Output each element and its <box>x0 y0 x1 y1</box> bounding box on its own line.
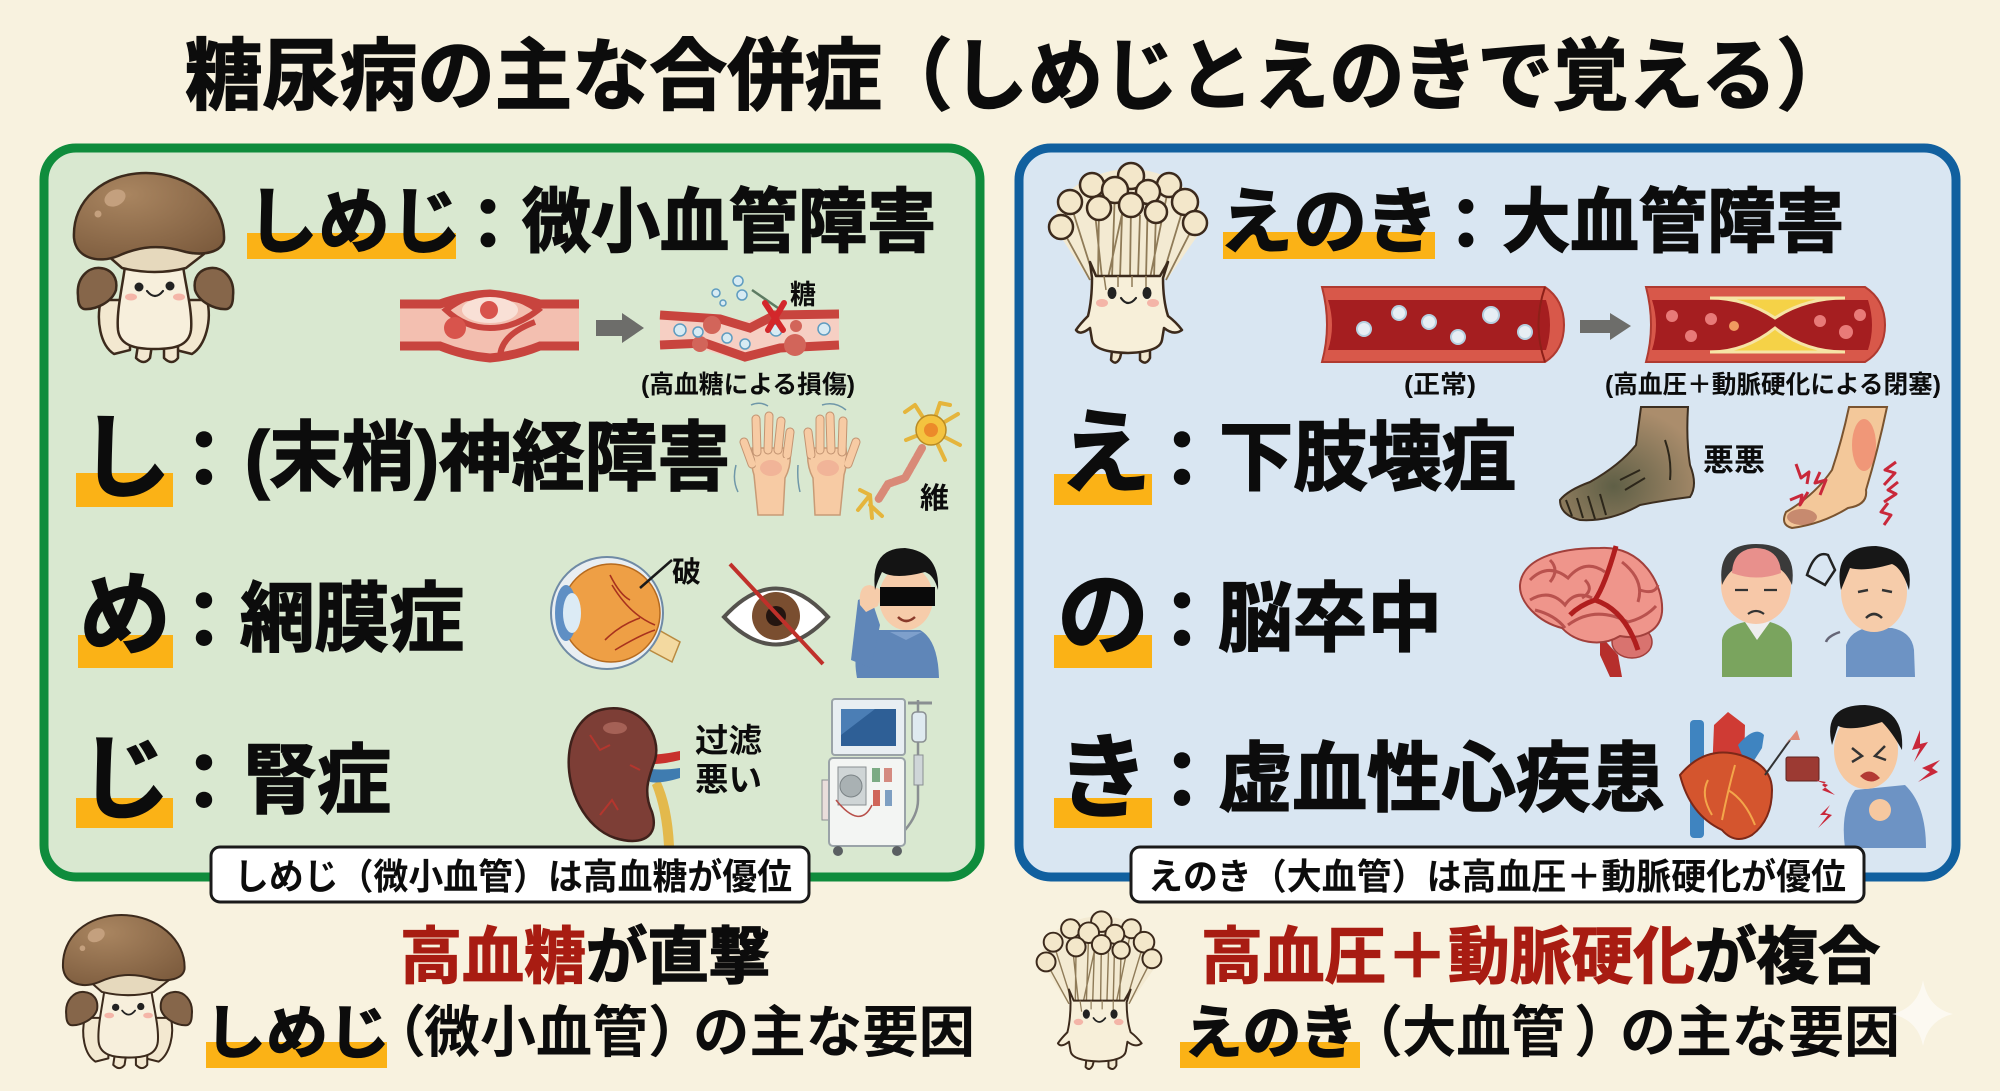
row: e gangrene: え <box>1059 403 1151 505</box>
caption: occlusion: (高血圧＋動脈硬化による閉塞) <box>1605 371 1941 399</box>
row: shi neuropathy: (末梢)神経障害 <box>245 416 730 501</box>
mascot: enoki <box>1049 163 1207 363</box>
row: no stroke <box>1054 565 1442 668</box>
heading: shimeji: しめじ <box>246 183 462 263</box>
arrow <box>596 313 644 343</box>
row: no stroke: の <box>1057 565 1149 667</box>
label: worsening: 悪悪 <box>1703 443 1765 478</box>
summary: shimeji <box>204 923 975 1068</box>
row: ji nephropathy: 腎症 <box>243 739 391 824</box>
summary: enoki: 高血圧＋動脈硬化 <box>1201 923 1695 992</box>
diagram: damaged capillary <box>660 276 839 360</box>
label: fiber: 維 <box>920 482 949 515</box>
label: sugar: 糖 <box>790 280 816 310</box>
diagram: normal capillary <box>400 290 579 362</box>
arrow <box>1580 313 1631 340</box>
icon: numb hands <box>734 403 856 515</box>
diagram: normal artery <box>1322 287 1564 362</box>
row: ki ischemic heart disease: き <box>1057 728 1149 830</box>
icon: blocked vision eye <box>724 564 828 664</box>
heading: shimeji: ： <box>453 186 523 264</box>
summary: shimeji: が直撃 <box>586 923 770 992</box>
diagram: occluded artery <box>1646 287 1885 362</box>
summary: shimeji: の主な要因 <box>693 1001 975 1064</box>
icon: dark gangrenous foot <box>1560 407 1694 520</box>
row: shi neuropathy: し <box>79 408 171 510</box>
row: ki ischemic heart disease <box>1054 728 1665 830</box>
summary: shimeji: ） <box>648 1001 704 1064</box>
row: ji nephropathy: じ <box>79 729 171 831</box>
row: shi neuropathy: ： <box>165 416 243 504</box>
icon: worried man <box>1807 546 1915 677</box>
row: no stroke: ： <box>1143 577 1221 665</box>
icon: brain with arteries <box>1520 546 1662 677</box>
heading: shimeji <box>246 183 936 264</box>
heading: enoki: 大血管障害 <box>1502 183 1844 261</box>
mascot: small enoki <box>1037 911 1161 1069</box>
title: 糖尿病の主な合併症 <box>185 32 882 120</box>
title <box>185 32 1852 120</box>
row: no stroke: 脳卒中 <box>1218 577 1442 662</box>
caption: normal: (正常) <box>1404 371 1476 399</box>
row: me retinopathy: ： <box>165 577 243 665</box>
summary: shimeji: 高血糖 <box>400 923 586 992</box>
row: shi neuropathy <box>76 408 730 510</box>
title: （しめじとえのきで覚える） <box>877 32 1852 120</box>
icon: dialysis machine <box>822 699 932 856</box>
summary: enoki: えのき <box>1184 1001 1358 1066</box>
row: ji nephropathy <box>76 729 391 831</box>
row: e gangrene: 下肢壊疽 <box>1219 416 1516 501</box>
summary: shimeji: 微小血管 <box>424 1001 648 1064</box>
icon: elderly man with brain <box>1721 544 1793 677</box>
label: poor filtration: 过滤 <box>695 722 762 759</box>
row: me retinopathy: 網膜症 <box>240 577 464 662</box>
mascot: small shimeji <box>63 915 192 1068</box>
summary: enoki: （ <box>1347 1001 1403 1064</box>
summary: shimeji: （ <box>370 1001 426 1064</box>
icon: heart anatomy <box>1680 712 1790 839</box>
summary: enoki: ） <box>1574 1001 1630 1064</box>
mascot: shimeji <box>74 173 233 362</box>
panel: shimeji (microvascular) <box>44 148 980 877</box>
callout: enoki: えのき（大血管）は高血圧＋動脈硬化が優位 <box>1148 856 1846 897</box>
panel background green <box>44 148 980 877</box>
panel background blue <box>1019 148 1956 877</box>
row: ki ischemic heart disease: ： <box>1143 737 1221 825</box>
row: e gangrene: ： <box>1143 416 1221 504</box>
summary: shimeji: しめじ <box>204 1001 390 1066</box>
heading: shimeji: 微小血管障害 <box>522 183 936 261</box>
icon: painful red leg <box>1784 407 1898 528</box>
summary: enoki: が複合 <box>1695 923 1880 992</box>
label: poor filtration <box>695 722 762 798</box>
panel: enoki (macrovascular) <box>1019 148 1956 877</box>
label: rupture: 破 <box>672 556 701 589</box>
icon: man with obscured vision <box>851 548 939 678</box>
row: e gangrene <box>1054 403 1516 505</box>
summary: enoki <box>1180 923 1900 1068</box>
icon: sparkle watermark <box>1892 980 1953 1046</box>
callout: shimeji: しめじ（微小血管）は高血糖が優位 <box>234 856 792 897</box>
row: ki ischemic heart disease: 虚血性心疾患 <box>1218 737 1665 822</box>
heading: enoki: ： <box>1431 186 1501 264</box>
row: me retinopathy <box>78 565 464 668</box>
icon: infarct tissue <box>1785 730 1819 781</box>
heading: enoki: えのき <box>1219 183 1439 263</box>
summary: enoki: の主な要因 <box>1620 1001 1900 1064</box>
row: me retinopathy: め <box>79 565 171 667</box>
icon: man with chest pain <box>1815 705 1940 848</box>
caption: hyperglycemia damage: (高血糖による損傷) <box>641 371 855 399</box>
label: poor filtration: 悪い <box>695 761 762 798</box>
summary: enoki: 大血管 <box>1402 1001 1565 1064</box>
row: ji nephropathy: ： <box>165 739 243 827</box>
heading: enoki <box>1219 183 1844 264</box>
icon: neuron <box>858 403 960 518</box>
icon: kidney <box>569 708 680 846</box>
icon: eyeball anatomy <box>551 557 680 669</box>
